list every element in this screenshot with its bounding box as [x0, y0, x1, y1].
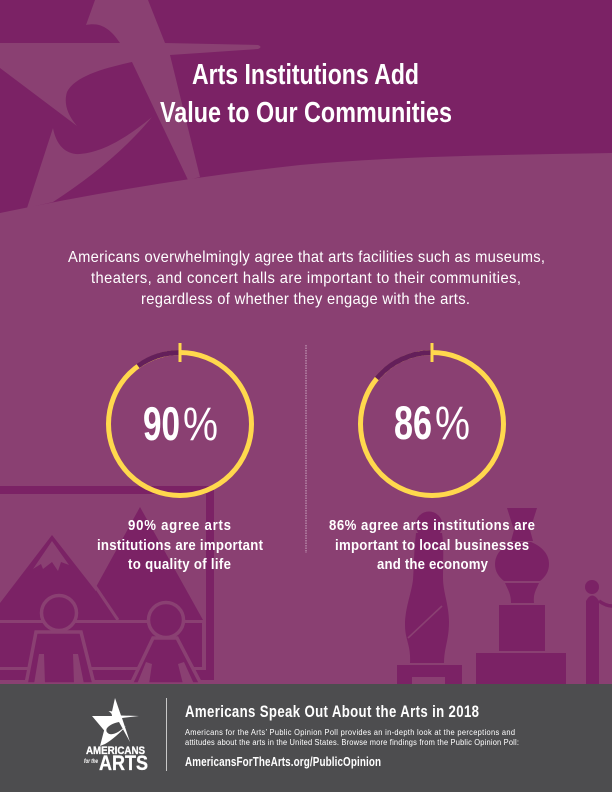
illustration: vase on pedestals: [476, 508, 566, 684]
caption: 86%: 86% agree arts institutions are: [329, 516, 535, 533]
title: [160, 59, 452, 129]
caption: 90%: to quality of life: [128, 555, 231, 572]
caption: 86%: important to local businesses: [335, 536, 529, 553]
caption: 90%: institutions are important: [97, 536, 263, 553]
footer heading: Americans Speak Out About the Arts in 2018: [185, 703, 479, 721]
footer body text: Americans for the Arts’ Public Opinion Poll provides an in-depth look at the perceptions and: [185, 728, 515, 737]
intro paragraph: Americans overwhelmingly agree that arts facilities such as museums,: [68, 248, 545, 266]
logo: Americans for the Arts: AMERICANS: [86, 745, 145, 757]
logo: Americans for the Arts: ARTS: [99, 752, 148, 775]
illustration: rope barrier post: [585, 580, 612, 684]
lower lighter panel with curved top: [0, 153, 612, 685]
big number: 86%: %: [435, 396, 470, 449]
caption: 90%: 90% agree arts: [128, 516, 231, 533]
illustration: seated figure right: [131, 602, 201, 684]
footer body text: attitudes about the arts in the United States. Browse more findings from the Public Opinion Poll:: [185, 738, 519, 747]
big number: 90%: %: [183, 397, 218, 450]
caption: 90%: [97, 516, 263, 572]
title: Value to Our Communities: [160, 97, 452, 129]
intro paragraph: [68, 248, 545, 308]
center divider: [305, 345, 307, 553]
intro paragraph: theaters, and concert halls are important to their communities,: [91, 269, 521, 287]
illustration: framed painting: [0, 486, 214, 680]
title: Arts Institutions Add: [192, 59, 419, 91]
intro paragraph: regardless of whether they engage with the arts.: [141, 290, 470, 308]
footer band: [0, 684, 612, 792]
donut chart: 90%: [108, 343, 252, 496]
illustration: bust statue on stand: [397, 512, 462, 684]
footer divider: [166, 698, 167, 771]
big number: 90%: [143, 397, 218, 450]
big number: 86%: 86: [394, 396, 432, 449]
logo: Americans for the Arts: [84, 698, 148, 775]
caption: 86%: [329, 516, 535, 572]
big number: 90%: 90: [143, 397, 180, 450]
illustration: seated figure left: [26, 596, 94, 684]
footer body text: [185, 728, 519, 747]
decorative background star: [0, 0, 260, 208]
header band background: [0, 0, 612, 220]
logo: Americans for the Arts: for the: [84, 759, 98, 765]
donut chart: 86%: [360, 343, 504, 496]
footer link: AmericansForTheArts.org/PublicOpinion: [185, 756, 381, 769]
big number: 86%: [394, 396, 470, 449]
caption: 86%: and the economy: [377, 555, 488, 572]
